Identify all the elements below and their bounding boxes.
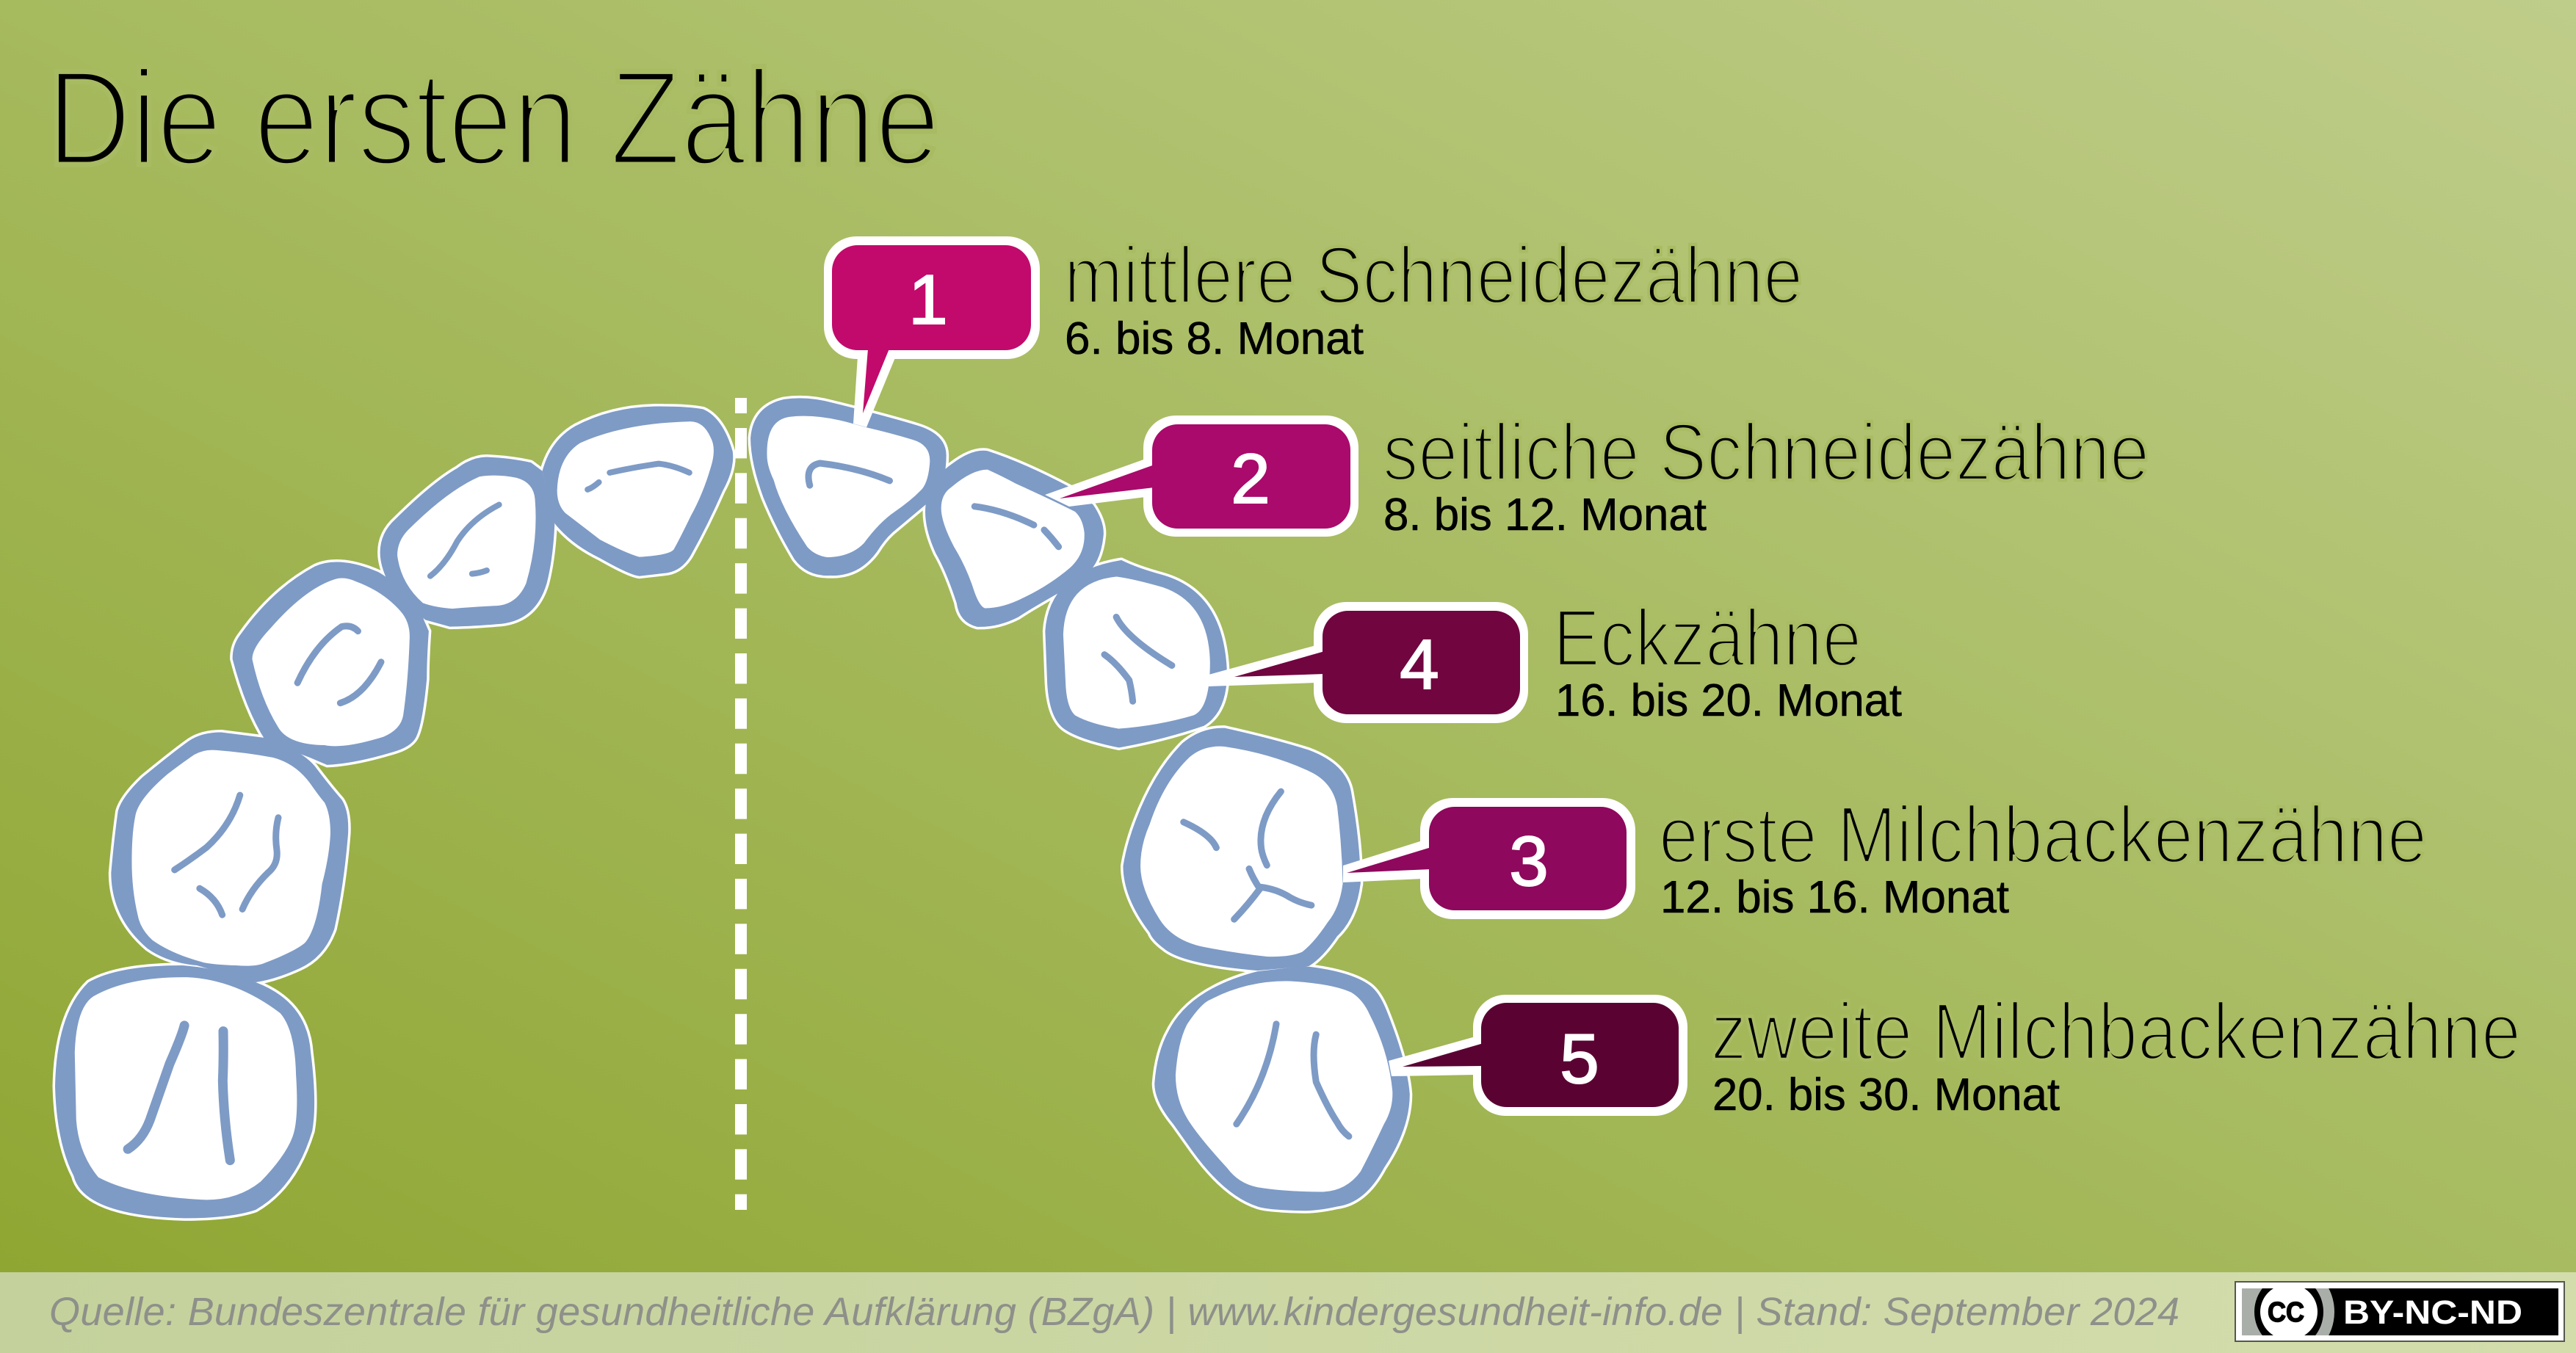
callout 4: 4 bbox=[1400, 625, 1439, 704]
callout 3 bbox=[1343, 798, 1635, 919]
label 4 bbox=[1553, 593, 1902, 726]
callout 4 bbox=[1208, 602, 1528, 723]
tooth: right lateral incisor bbox=[925, 451, 1104, 627]
callout 2 bbox=[1045, 416, 1358, 537]
tooth: left central incisor bbox=[543, 406, 733, 576]
licence badge bbox=[2235, 1281, 2565, 1342]
callout 1: 1 bbox=[908, 261, 948, 339]
label 1: mittlere Schneidezähne bbox=[1064, 231, 1803, 321]
tooth: left second molar bbox=[55, 965, 314, 1218]
licence badge: BY-NC-ND bbox=[2343, 1294, 2522, 1331]
label 5 bbox=[1711, 987, 2521, 1120]
tooth: right second molar bbox=[1154, 966, 1410, 1211]
label 3 bbox=[1659, 790, 2427, 923]
label 3: 12. bis 16. Monat bbox=[1660, 872, 2009, 923]
tooth: right first molar bbox=[1123, 728, 1361, 971]
label 2 bbox=[1383, 407, 2149, 540]
title: Die ersten Zähne bbox=[47, 42, 940, 193]
tooth: right central incisor bbox=[750, 398, 947, 576]
white tooth outlines bbox=[55, 398, 1410, 1218]
midline dashed divider bbox=[735, 398, 747, 1210]
tooth: left canine bbox=[233, 562, 429, 765]
label 2: 8. bis 12. Monat bbox=[1383, 490, 1707, 540]
tooth: left lateral incisor bbox=[380, 457, 554, 627]
footer band bbox=[0, 1272, 2576, 1353]
licence badge: CC bbox=[2268, 1297, 2304, 1328]
source line: Quelle: Bundeszentrale für gesundheitliche Aufklärung (BZgA) | www.kindergesundheit-info.de | Stand: September 2024 bbox=[49, 1290, 2179, 1334]
tooth: left first molar bbox=[111, 732, 348, 982]
callout 1 bbox=[824, 236, 1040, 427]
label 5: 20. bis 30. Monat bbox=[1712, 1070, 2060, 1120]
label 2: seitliche Schneidezähne bbox=[1383, 407, 2149, 498]
callout 3: 3 bbox=[1509, 822, 1549, 901]
label 3: erste Milchbackenzähne bbox=[1659, 790, 2427, 880]
label 1: 6. bis 8. Monat bbox=[1065, 313, 1364, 364]
callout 2: 2 bbox=[1231, 440, 1270, 518]
label 4: 16. bis 20. Monat bbox=[1555, 675, 1902, 726]
callout 5: 5 bbox=[1560, 1020, 1599, 1098]
callout 5 bbox=[1389, 995, 1687, 1116]
label 4: Eckzähne bbox=[1553, 593, 1862, 683]
tooth: right canine bbox=[1045, 560, 1227, 747]
label 1 bbox=[1064, 231, 1803, 364]
